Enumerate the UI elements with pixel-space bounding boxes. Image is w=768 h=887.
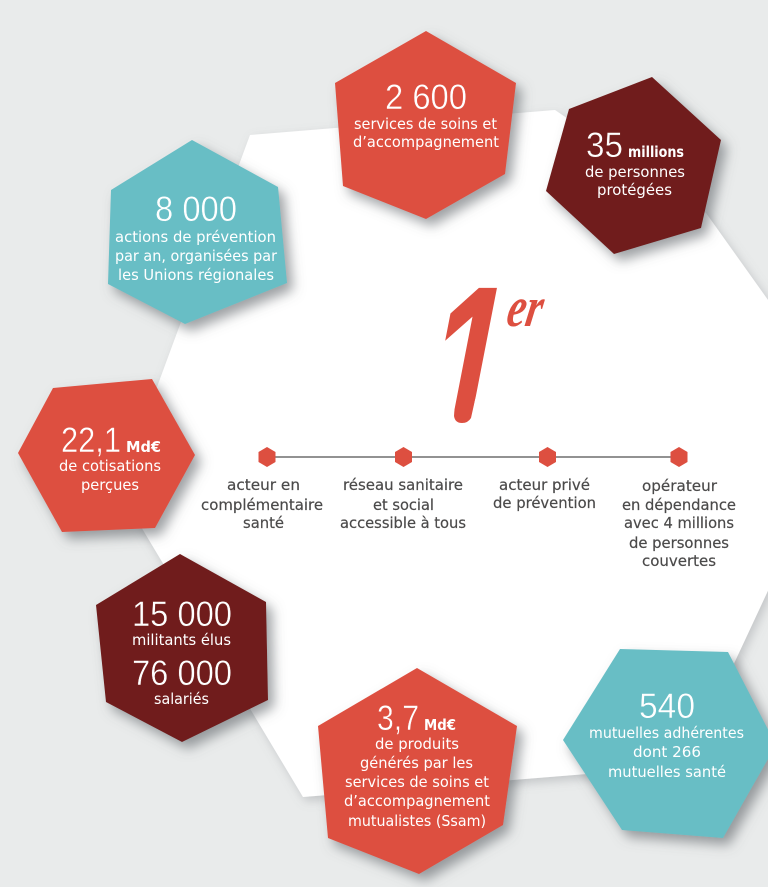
stat text: 76 000	[132, 654, 232, 693]
label: dépendance	[622, 477, 736, 570]
label: réseau sanitaire: accessible à tous	[340, 514, 466, 532]
white central hexagon background	[119, 110, 768, 797]
panel: 3,7 Md€	[318, 668, 517, 874]
red hexagon	[335, 31, 516, 219]
stat text: d’accompagnement	[353, 133, 499, 151]
panel: 8 000 actions	[108, 140, 287, 324]
panel: 35 millions	[546, 77, 721, 254]
dark hexagon	[546, 77, 721, 254]
label: dépendance: en dépendance	[622, 496, 736, 514]
label: complémentaire santé: complémentaire	[201, 496, 323, 514]
panel: 22,1 Md€	[18, 379, 195, 532]
stat text: d’accompagnement	[344, 792, 490, 810]
stat text: 15 000	[132, 595, 232, 634]
label: complémentaire santé	[201, 476, 323, 532]
dark hexagon	[96, 554, 268, 742]
label: réseau sanitaire	[340, 476, 466, 532]
teal hexagon	[108, 140, 287, 324]
red hexagon	[318, 668, 517, 874]
stat text: 8 000	[155, 190, 237, 229]
stat text: générés par les	[360, 754, 473, 772]
stat text: mutuelles adhérentes	[589, 724, 744, 742]
stat text	[585, 126, 685, 199]
stat text: dont 266	[633, 743, 701, 761]
timeline	[258, 447, 688, 467]
stat text: de personnes	[585, 163, 685, 181]
label: réseau sanitaire: réseau sanitaire	[343, 476, 463, 494]
stat text: perçues	[81, 476, 139, 494]
stat text	[353, 78, 499, 151]
stat text: de cotisations	[59, 457, 161, 475]
stat text: millions	[628, 143, 684, 161]
stat text	[115, 190, 278, 284]
panel: 540 mutuelles	[563, 649, 768, 838]
stat text	[132, 595, 232, 708]
teal hexagon	[563, 649, 768, 838]
stat text: 35	[586, 126, 623, 165]
stat text: services de soins et	[345, 773, 489, 791]
stat text: salariés	[154, 690, 209, 708]
label: complémentaire santé: santé	[243, 514, 284, 532]
marker 4	[670, 447, 688, 467]
label: prévention: acteur privé	[499, 476, 590, 494]
panel: militants et salariés	[96, 554, 268, 742]
stat text: actions de prévention	[115, 228, 276, 246]
stat text: protégées	[597, 181, 672, 199]
label: prévention: de prévention	[493, 494, 596, 512]
heading: 1er	[445, 288, 545, 423]
stat text	[589, 687, 744, 781]
stat text: 22,1	[61, 421, 121, 460]
stat text	[59, 421, 161, 494]
label: dépendance: avec 4 millions	[624, 514, 734, 532]
heading: 1er: er	[503, 275, 549, 338]
label: dépendance: couvertes	[642, 552, 716, 570]
stat text: mutuelles santé	[608, 763, 726, 781]
marker 3	[539, 447, 556, 467]
heading: 1er: 1	[418, 239, 514, 496]
label: réseau sanitaire: et social	[373, 496, 434, 514]
label: dépendance: de personnes	[629, 534, 729, 552]
panel: 2 600 services	[335, 31, 516, 219]
marker 2	[395, 447, 412, 467]
stat text: Md€	[424, 716, 456, 734]
label: dépendance: opérateur	[642, 477, 718, 495]
stat text: 540	[639, 687, 695, 726]
stat text: 2 600	[385, 78, 467, 117]
label: prévention	[493, 476, 596, 512]
stat text: services de soins et	[354, 115, 497, 133]
stat text: par an, organisées par	[115, 247, 278, 265]
marker 1	[258, 447, 276, 467]
stat text: les Unions régionales	[118, 266, 274, 284]
stat text: Md€	[126, 438, 161, 456]
stat text	[344, 699, 490, 830]
stat text: 3,7	[377, 699, 419, 738]
stat text: militants élus	[132, 631, 231, 649]
stat text: de produits	[375, 735, 459, 753]
label: complémentaire santé: acteur en	[227, 476, 300, 494]
stat text: mutualistes (Ssam)	[348, 812, 486, 830]
red hexagon	[18, 379, 195, 532]
